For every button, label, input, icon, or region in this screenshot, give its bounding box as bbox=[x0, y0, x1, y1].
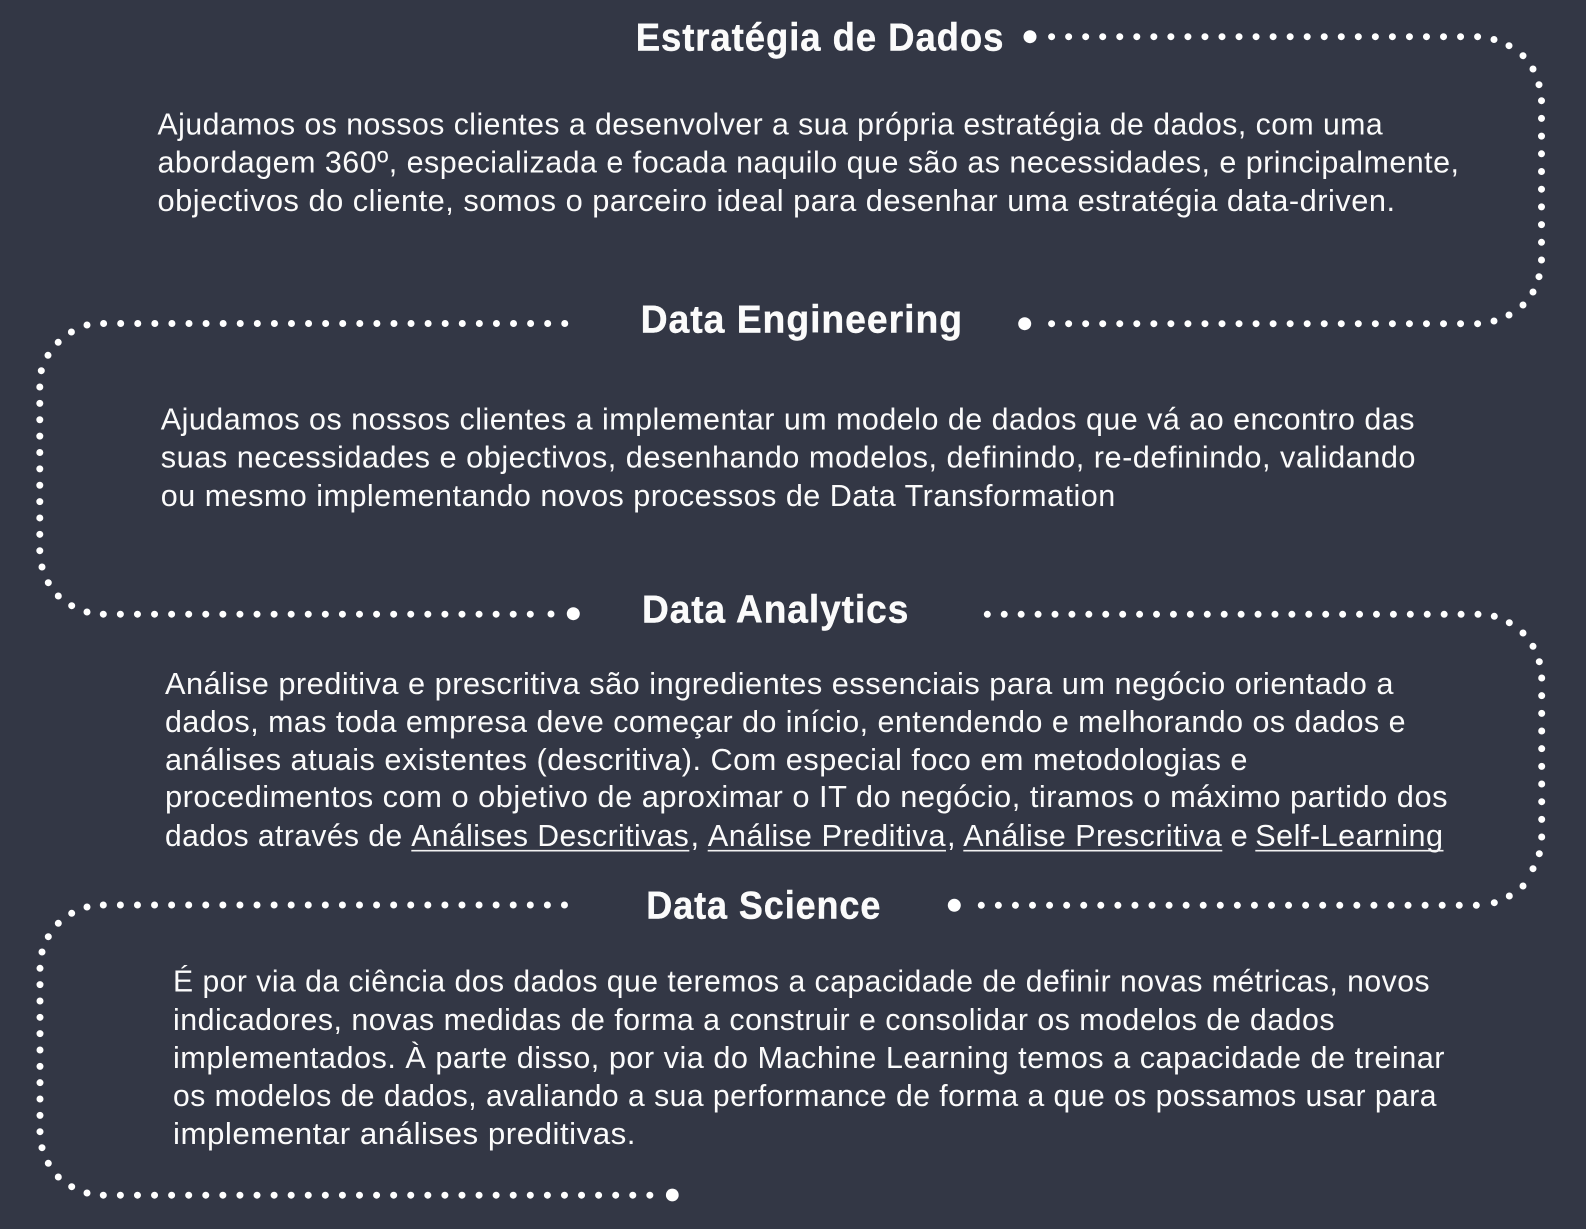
connector: dotted path around Estratégia de Dados bbox=[1018, 30, 1542, 330]
text block: Estratégia de Dados description: objectivos do cliente, somos o parceiro ideal para desenhar uma estratégia data-driven. bbox=[158, 183, 1396, 218]
text block: Data Science description: É por via da ciência dos dados que teremos a capacidade de definir novas métricas, novos bbox=[173, 964, 1430, 998]
text block: Data Engineering description bbox=[161, 402, 1416, 513]
heading: Data Analytics: Data Analytics bbox=[642, 589, 909, 632]
text block: Data Engineering description: ou mesmo implementando novos processos de Data Transformation bbox=[161, 478, 1116, 513]
text block: Data Analytics description: procedimentos com o objetivo de aproximar o IT do negócio, tiramos o máximo partido dos bbox=[165, 779, 1448, 814]
text block: Data Analytics description: Self-Learning bbox=[1255, 818, 1444, 853]
text block: Data Analytics description: , bbox=[947, 818, 956, 853]
panel: Data Engineering bbox=[161, 299, 1416, 513]
panel: Data Science bbox=[173, 884, 1445, 1151]
text block: Data Analytics description: e bbox=[1230, 818, 1248, 853]
text block: Estratégia de Dados description: Ajudamos os nossos clientes a desenvolver a sua própria estratégia de dados, com uma bbox=[158, 106, 1383, 141]
text block: Data Analytics description: dados através de bbox=[165, 818, 403, 853]
panel: Estratégia de Dados bbox=[158, 17, 1460, 218]
connector: dotted path around Data Science bbox=[40, 905, 679, 1201]
text block: Data Science description: implementar análises preditivas. bbox=[173, 1116, 636, 1151]
text block: Data Analytics description: Análise Preditiva bbox=[708, 818, 946, 853]
text block: Estratégia de Dados description: abordagem 360º, especializada e focada naquilo que são as necessidades, e principalmente, bbox=[158, 145, 1460, 180]
connector: dotted path around Data Analytics bbox=[948, 614, 1542, 912]
text block: Data Analytics description: Análise Prescritiva bbox=[963, 818, 1223, 853]
heading: Data Engineering: Data Engineering bbox=[641, 299, 963, 342]
text block: Data Analytics description: Análise preditiva e prescritiva são ingredientes essenciais para um negócio orientado a bbox=[165, 666, 1394, 701]
text block: Data Analytics description: , bbox=[690, 818, 700, 853]
text block: Data Analytics description: dados, mas toda empresa deve começar do início, entendendo e melhorando os dados e bbox=[165, 704, 1406, 739]
text block: Data Science description: os modelos de dados, avaliando a sua performance de forma a que os possamos usar para bbox=[173, 1078, 1437, 1113]
heading: Estratégia de Dados: Estratégia de Dados bbox=[636, 17, 1004, 60]
text block: Data Science description: indicadores, novas medidas de forma a construir e consolidar os modelos de dados bbox=[173, 1002, 1335, 1037]
panel: Data Analytics bbox=[165, 589, 1448, 853]
text block: Data Engineering description: Ajudamos os nossos clientes a implementar um modelo de dados que vá ao encontro das bbox=[161, 402, 1415, 436]
text block: Data Engineering description: suas necessidades e objectivos, desenhando modelos, definindo, re-definindo, validando bbox=[161, 440, 1416, 474]
text block: Data Science description: implementados. À parte disso, por via do Machine Learning temos a capacidade de treinar bbox=[173, 1040, 1445, 1075]
text block: Data Analytics description: análises atuais existentes (descritiva). Com especial foco em metodologias e bbox=[165, 742, 1248, 777]
connector: dotted path around Data Engineering bbox=[40, 324, 580, 620]
text block: Data Science description bbox=[173, 964, 1445, 1151]
text block: Data Analytics description: Análises Descritivas bbox=[411, 818, 689, 853]
text block: Estratégia de Dados description bbox=[158, 106, 1460, 218]
heading: Data Science: Data Science bbox=[646, 884, 881, 927]
text block: Data Analytics description bbox=[165, 666, 1448, 853]
